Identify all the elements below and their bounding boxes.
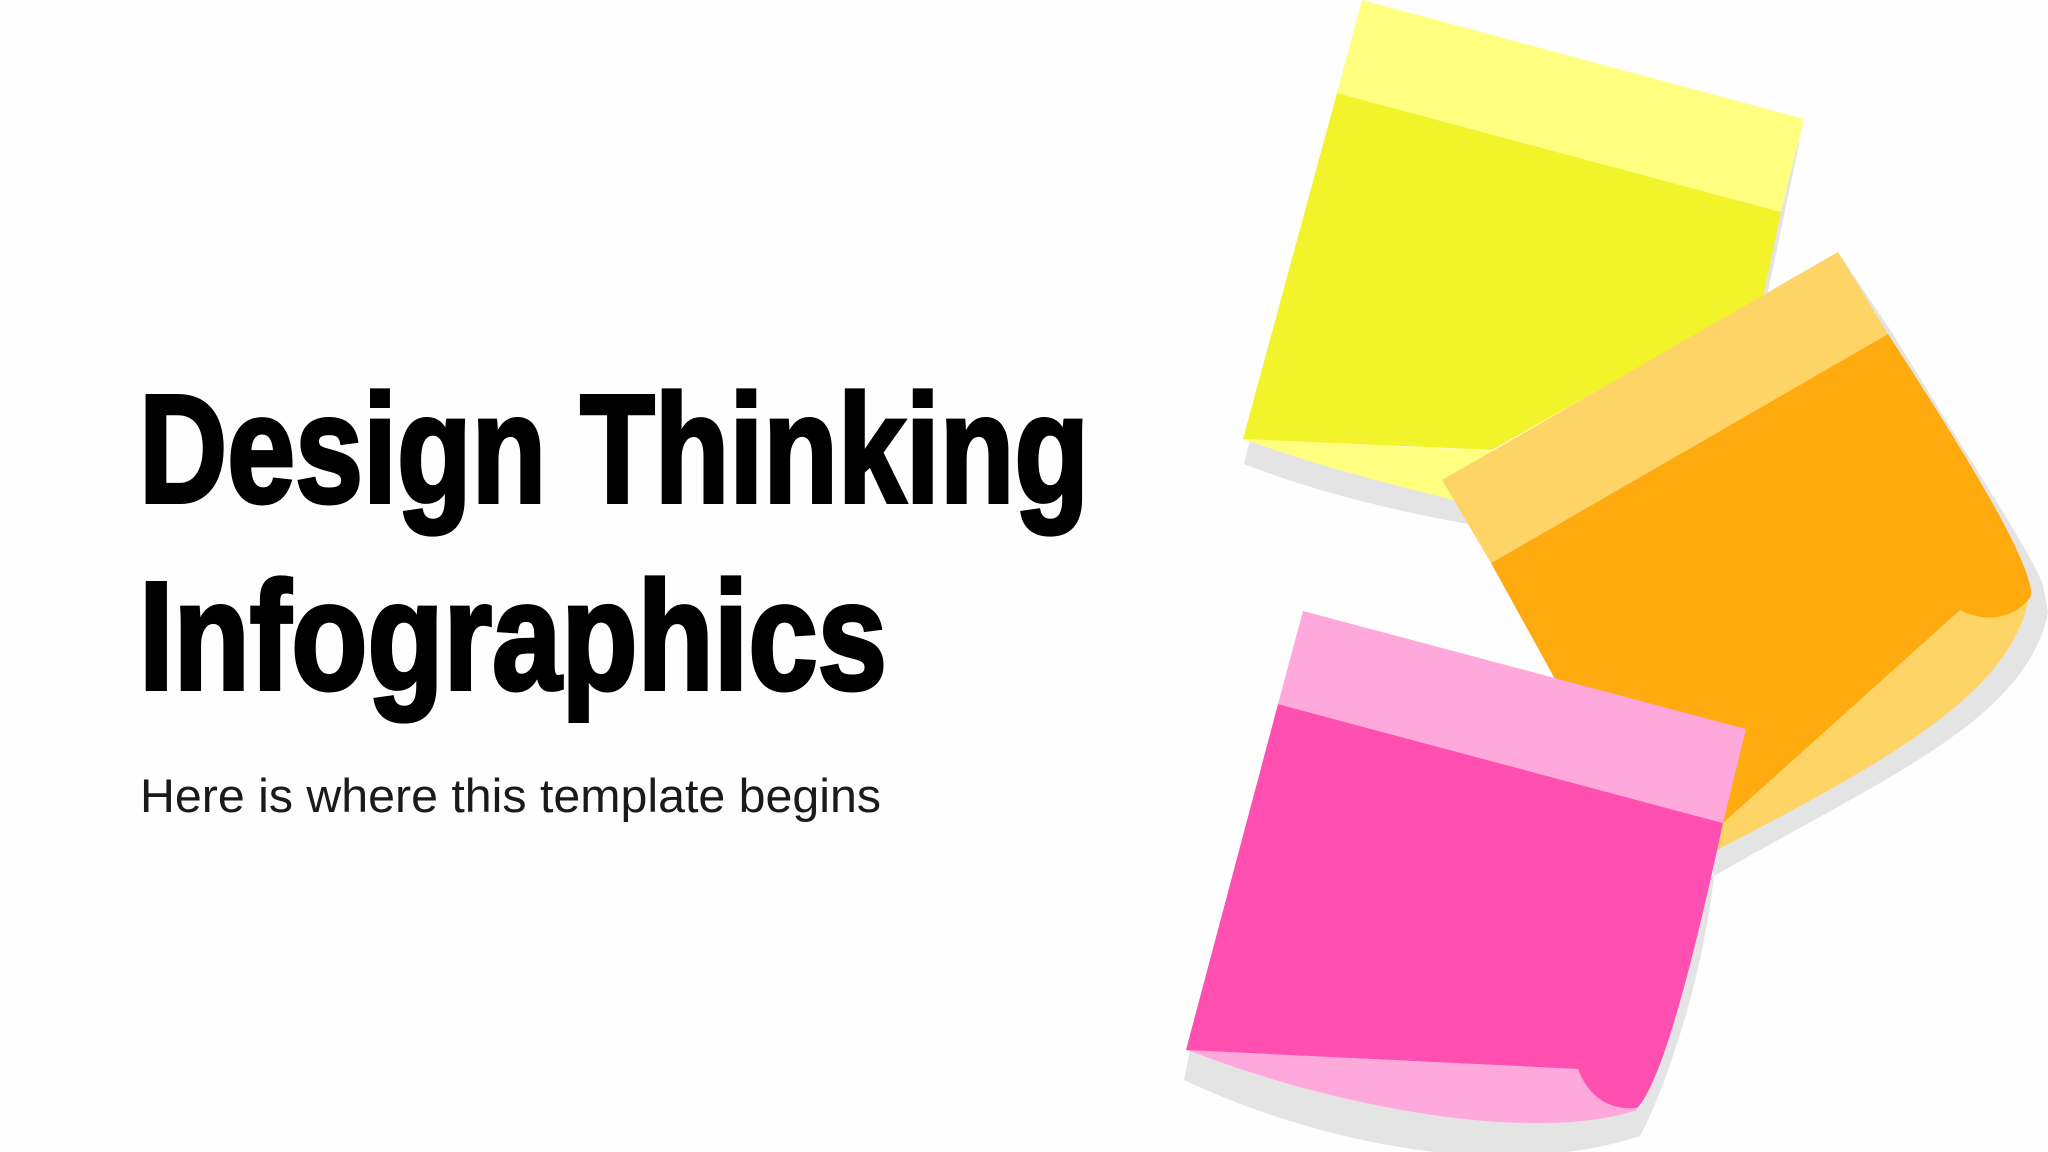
title (139, 363, 1089, 722)
subtitle: Here is where this template begins (140, 769, 881, 822)
orange sticky note (1442, 252, 2048, 876)
yellow sticky note (1243, 0, 1804, 524)
pink sticky note (1184, 611, 1746, 1152)
title: Design Thinking (139, 363, 1089, 535)
title: Infographics (139, 550, 887, 722)
